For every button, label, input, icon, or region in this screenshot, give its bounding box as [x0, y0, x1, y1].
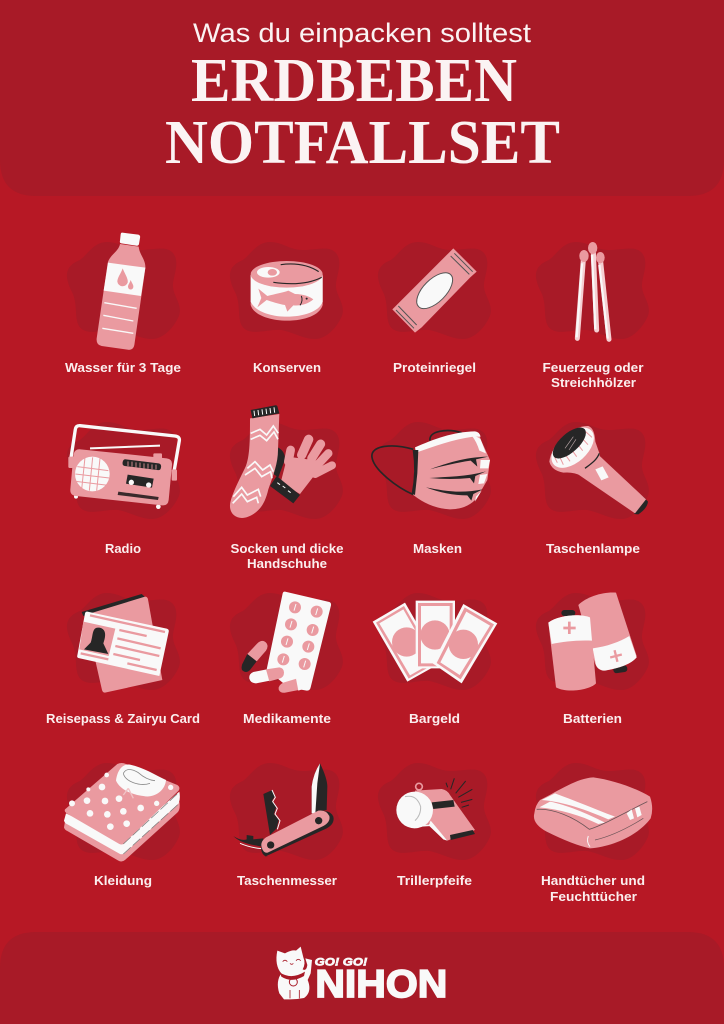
icon: folded clothes [64, 763, 180, 862]
label: Trillerpfeife [397, 874, 472, 888]
icon: banknotes [373, 601, 497, 683]
label [541, 874, 645, 904]
label: Streichhölzer [551, 376, 636, 390]
text: GO! GO!: GO! GO! [315, 957, 368, 969]
heading line 1: ERDBEBEN [191, 47, 517, 115]
label: Handtücher und [541, 874, 645, 888]
label: Socken und dicke [230, 542, 344, 556]
item: protein bar [378, 242, 491, 375]
item: mask [372, 422, 491, 556]
icon: batteries [548, 593, 637, 690]
label: Reisepass & Zairyu Card [46, 712, 200, 726]
item: medicine [230, 592, 343, 726]
label: Taschenlampe [546, 542, 640, 556]
label: Medikamente [243, 712, 331, 726]
icon: towel [534, 777, 652, 848]
label: Wasser für 3 Tage [65, 361, 181, 375]
title [165, 18, 560, 177]
label: Masken [413, 542, 462, 556]
item: flashlight [536, 420, 649, 556]
icon: lucky cat [276, 947, 312, 999]
label: Bargeld [409, 712, 460, 726]
item: pocket knife [230, 763, 343, 888]
label: Kleidung [94, 874, 152, 888]
icon: whistle [396, 778, 475, 841]
item: batteries [536, 593, 649, 726]
item: whistle [378, 763, 491, 888]
text: NIHON: NIHON [315, 963, 447, 1006]
item: water bottle [65, 233, 181, 375]
icon: radio [68, 426, 179, 509]
icon: pocket knife [233, 763, 334, 857]
item: socks and gloves [230, 405, 344, 571]
logo [276, 947, 447, 1006]
footer panel [0, 932, 724, 1024]
item: matches [536, 242, 649, 390]
icon: medicine [242, 592, 331, 693]
label: Feuerzeug oder [542, 361, 644, 375]
icon: matches [577, 242, 609, 339]
subtitle: Was du einpacken solltest [193, 18, 532, 48]
icon: fish can [251, 261, 323, 321]
item: towel [534, 763, 652, 904]
item: radio [67, 422, 180, 556]
icon: face mask [372, 431, 490, 509]
label: Taschenmesser [237, 874, 337, 888]
icon: flashlight [544, 420, 648, 514]
icon: protein bar [392, 248, 477, 333]
header panel [0, 0, 724, 196]
icon: passport and ID card [77, 594, 169, 693]
item: passport and card [46, 593, 200, 726]
label: Handschuhe [247, 557, 327, 571]
icon: water bottle [97, 233, 145, 350]
label: Radio [105, 542, 141, 556]
item: cash [373, 593, 497, 726]
item: clothes [64, 763, 180, 888]
label: Feuchttücher [550, 890, 637, 904]
item: can [230, 242, 343, 375]
label: Batterien [563, 712, 622, 726]
label: Proteinriegel [393, 361, 476, 375]
label [230, 542, 344, 571]
icon: socks and gloves [230, 405, 332, 518]
label [542, 361, 644, 390]
label: Konserven [253, 361, 321, 375]
heading line 2: NOTFALLSET [165, 109, 560, 177]
